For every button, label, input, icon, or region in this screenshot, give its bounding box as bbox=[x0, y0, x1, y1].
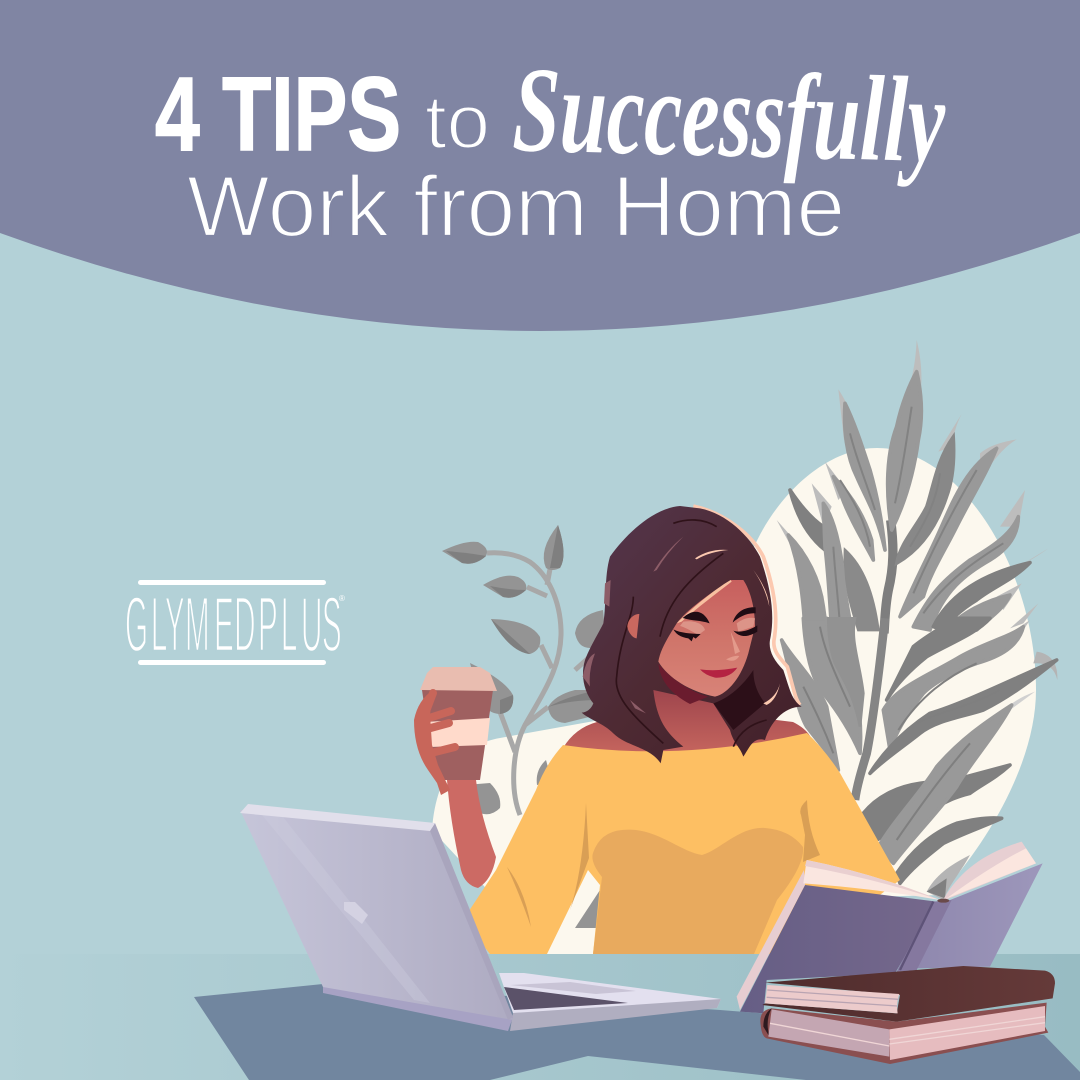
cream backdrop shapes bbox=[432, 448, 1036, 954]
neck and shoulders bbox=[563, 680, 810, 770]
jaw shadow bbox=[658, 663, 708, 704]
nose bbox=[726, 632, 740, 661]
plant stem bbox=[487, 553, 603, 815]
right eyelid bbox=[737, 618, 755, 632]
title: 4 TIPS: 4 TIPS bbox=[155, 56, 401, 173]
spine bbox=[897, 900, 952, 972]
hair strands bbox=[616, 520, 767, 747]
lower book front pages bbox=[768, 1009, 889, 1057]
lips bbox=[700, 668, 737, 678]
stacked books bbox=[760, 966, 1055, 1064]
logo: GlyMed Plus: ® bbox=[339, 594, 345, 603]
spine groove bbox=[900, 902, 933, 970]
hair main shape bbox=[582, 506, 802, 763]
small plant, left bbox=[442, 525, 606, 928]
title: to: to bbox=[425, 80, 490, 165]
sweater folds bbox=[507, 800, 820, 927]
laptop logo bbox=[344, 902, 368, 924]
lower stem bbox=[855, 618, 885, 800]
hair dark lower right bbox=[713, 670, 765, 730]
face bbox=[658, 580, 757, 704]
palm lower fronds bbox=[782, 618, 1057, 900]
lid top rim bbox=[240, 804, 435, 831]
lower page lines bbox=[770, 1017, 1045, 1046]
left cover bbox=[740, 885, 937, 1013]
laptop lid bbox=[240, 810, 513, 1020]
logo: GlyMed Plus: GLYMEDPLUS bbox=[125, 581, 342, 668]
laptop bbox=[240, 804, 721, 1031]
left eyebrow bbox=[683, 612, 710, 623]
open book bbox=[737, 842, 1043, 1013]
lower book spine shadow bbox=[763, 1008, 772, 1037]
hair bbox=[582, 506, 802, 763]
hair rim light bbox=[693, 506, 800, 705]
right pages bbox=[943, 842, 1036, 899]
lower book side pages bbox=[889, 1006, 1045, 1060]
laptop front edge bbox=[510, 999, 721, 1031]
left lashes bbox=[673, 629, 701, 641]
right cover bbox=[917, 863, 1043, 968]
left page edge bbox=[737, 870, 805, 1010]
laptop base top bbox=[499, 973, 721, 1013]
laptop trackpad bbox=[510, 982, 636, 994]
woman bbox=[414, 506, 900, 954]
face shape bbox=[658, 580, 755, 697]
lid sheen bbox=[262, 815, 430, 1003]
cup body bbox=[422, 690, 493, 780]
cup lid bbox=[420, 667, 497, 691]
lid side edge bbox=[430, 823, 513, 1020]
hair highlights bbox=[583, 537, 683, 713]
coffee cup bbox=[420, 667, 497, 780]
desk shadow bbox=[194, 984, 1080, 1080]
header banner bbox=[0, 0, 1080, 331]
sweater chest shade bbox=[592, 828, 803, 954]
upper book cover bbox=[762, 966, 1055, 1022]
laptop keyboard bbox=[504, 987, 628, 1010]
laptop hinge bbox=[323, 985, 513, 1031]
right eyebrow bbox=[733, 607, 756, 623]
title: Work from Home: Work from Home bbox=[187, 159, 845, 255]
cup sleeve bbox=[425, 718, 490, 747]
desk surface bbox=[0, 954, 1080, 1080]
forearm bbox=[447, 780, 496, 888]
palm plant, right bbox=[777, 340, 1057, 900]
ear bbox=[627, 614, 639, 638]
upper page lines bbox=[767, 990, 898, 1006]
book binding bbox=[937, 899, 949, 903]
frond veins bbox=[833, 407, 1003, 627]
title bbox=[155, 42, 947, 255]
lower frond veins bbox=[803, 627, 1000, 840]
sweater bbox=[463, 733, 900, 954]
hand bbox=[414, 690, 455, 795]
upper book pages bbox=[765, 985, 899, 1013]
left top pages bbox=[803, 860, 940, 900]
hairline highlight bbox=[677, 580, 732, 623]
frond stem top bbox=[884, 520, 893, 633]
right lashes bbox=[733, 625, 757, 636]
plant leaves bbox=[442, 525, 606, 928]
plant leaf shading bbox=[446, 525, 600, 714]
left eyelid bbox=[680, 621, 705, 635]
lower book rim bbox=[760, 1003, 1048, 1064]
palm upper fronds bbox=[777, 340, 1048, 633]
